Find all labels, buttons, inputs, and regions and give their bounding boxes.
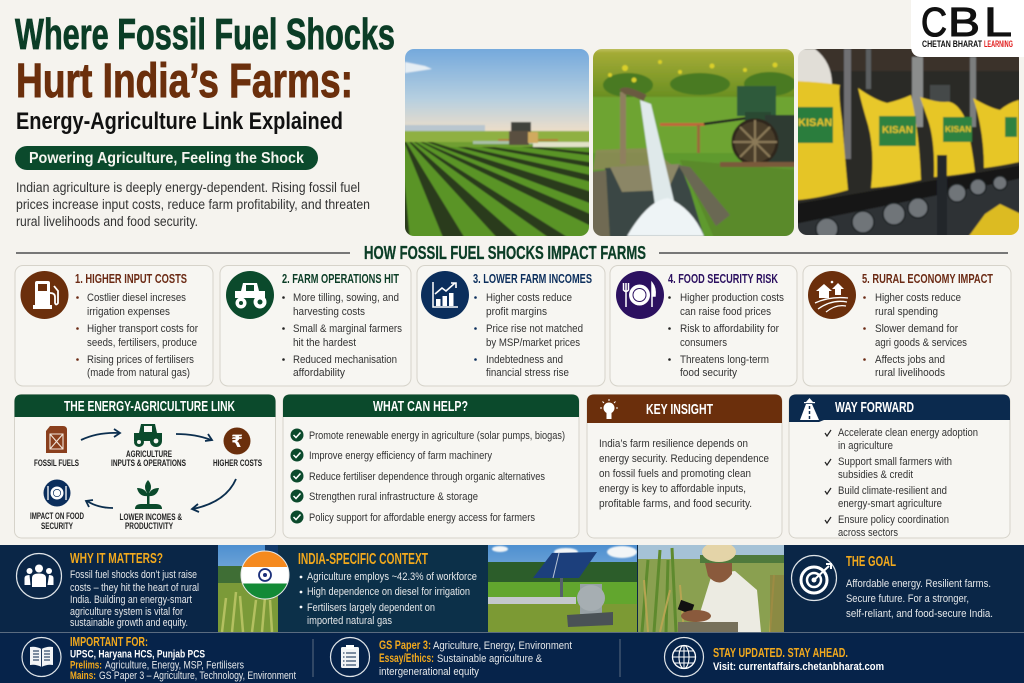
icon: tractor	[226, 271, 274, 319]
insight text: profitable farms, and food security.	[599, 498, 752, 510]
panel: important for: Prelims:	[70, 660, 102, 672]
icon: indian flag circle	[241, 551, 289, 600]
arrow	[81, 429, 120, 440]
bullets: food security	[680, 367, 737, 379]
panel: why it matters: India. Building an energy-smart	[70, 594, 192, 606]
panel: what can help	[283, 394, 579, 538]
heading: 2. FARM OPERATIONS HIT	[282, 272, 399, 286]
photo: urea fertiliser bags on conveyor: KISAN	[945, 124, 971, 134]
checklist: Accelerate clean energy adoption	[838, 427, 978, 439]
bullets: Threatens long-term	[680, 354, 769, 366]
panel header: KEY INSIGHT	[646, 401, 713, 418]
arrow	[192, 479, 236, 512]
checklist: Improve energy efficiency of farm machinery	[309, 450, 492, 462]
bullets: consumers	[680, 337, 727, 349]
logo: Chetan Bharat Learning	[911, 0, 1024, 57]
panel: 2 farm operations hit	[220, 266, 411, 386]
icon: road	[800, 398, 819, 420]
panel: the goal	[792, 553, 993, 620]
panel header: THE ENERGY-AGRICULTURE LINK	[64, 399, 235, 415]
insight text: India’s farm resilience depends on	[599, 438, 748, 450]
photo: farmer using phone in field	[638, 542, 784, 632]
bullets: (made from natural gas)	[87, 367, 190, 379]
panel: india-specific context: High dependence on diesel for irrigation	[307, 586, 470, 598]
panel: important for	[22, 635, 296, 682]
icon: plant, lower incomes: PRODUCTIVITY	[125, 521, 173, 531]
bullets	[474, 292, 583, 379]
panel: the goal: self-reliant, and food-secure India.	[846, 608, 993, 620]
title: Hurt India’s Farms:	[16, 55, 353, 108]
photo: urea fertiliser bags on conveyor	[795, 45, 1023, 240]
panel: gs paper and essay: Sustainable agriculture &	[437, 653, 543, 665]
panel: india-specific context: imported natural gas	[307, 615, 393, 627]
bullets: Higher transport costs for	[87, 323, 198, 335]
icon: clipboard checklist	[330, 638, 370, 676]
icon: people group	[16, 554, 62, 598]
insight text: energy security. Reducing dependence	[599, 453, 769, 465]
title: Where Fossil Fuel Shocks	[15, 10, 395, 59]
panel: gs paper and essay: Agriculture, Energy, Environment	[433, 640, 572, 652]
panel: way forward	[789, 394, 1010, 539]
bullets: Costlier diesel increses	[87, 292, 186, 304]
panel header: WHAT CAN HELP?	[373, 399, 468, 415]
checklist: Ensure policy coordination	[838, 514, 949, 526]
panel: gs paper and essay: Essay/Ethics:	[379, 651, 434, 665]
icon: plant, lower incomes: LOWER INCOMES &	[120, 512, 182, 522]
bullets: Price rise not matched	[486, 323, 583, 335]
icon: target with arrow	[792, 556, 836, 600]
panel: india-specific context: Agriculture employs ~42.3% of workforce	[307, 571, 477, 583]
intro paragraph	[16, 180, 370, 229]
icon: fuel can, fossil fuels	[34, 426, 79, 468]
checklist: Support small farmers with	[838, 456, 952, 468]
panel header	[587, 394, 782, 423]
bullets: Higher production costs	[680, 292, 784, 304]
photo: urea fertiliser bags on conveyor: KISAN	[882, 125, 913, 136]
checklist: Build climate-resilient and	[838, 485, 947, 497]
bullets: Affects jobs and	[875, 354, 945, 366]
icon: village houses and fields	[808, 271, 856, 319]
panel: why it matters: costs – they hit the heart of rural	[70, 582, 199, 594]
icon: globe	[664, 638, 704, 676]
section divider left	[16, 252, 350, 254]
panel: important for: GS Paper 3 – Agriculture, Technology, Environment	[99, 670, 296, 682]
icon: light bulb	[600, 399, 618, 419]
checklist	[290, 428, 565, 524]
panel: 5 rural economy impact	[803, 266, 1011, 386]
bullets: Indebtedness and	[486, 354, 563, 366]
bullets: Small & marginal farmers	[293, 323, 402, 335]
checklist: in agriculture	[838, 440, 893, 452]
panel: stay updated	[664, 638, 884, 676]
panel: 4 food security risk	[610, 266, 797, 386]
panel: important for: IMPORTANT FOR:	[70, 635, 148, 649]
panel header	[283, 394, 579, 417]
panel: the goal: Secure future. For a stronger,	[846, 593, 969, 605]
bullets	[863, 292, 967, 379]
bullets: harvesting costs	[293, 306, 365, 318]
panel: gs paper and essay: GS Paper 3:	[379, 638, 431, 652]
bullets: Risk to affordability for	[680, 323, 779, 335]
title: Energy-Agriculture Link Explained	[16, 108, 343, 135]
heading: 1. HIGHER INPUT COSTS	[75, 272, 187, 286]
checklist	[825, 427, 978, 539]
insight text: on fossil fuels and promoting clean	[599, 468, 751, 480]
panel: 3 lower farm incomes	[417, 266, 605, 386]
panel: the goal: Affordable energy. Resilient farms.	[846, 578, 991, 590]
icon: plate, impact on food security	[30, 480, 84, 531]
photo: diesel pump irrigating channel	[590, 45, 798, 240]
bullets: More tilling, sowing, and	[293, 292, 399, 304]
heading: 4. FOOD SECURITY RISK	[668, 272, 778, 286]
bullets: by MSP/market prices	[486, 337, 580, 349]
panel: gs paper and essay	[330, 638, 572, 678]
bullets	[668, 292, 784, 379]
checklist: across sectors	[838, 527, 898, 539]
icon: tractor, agriculture inputs: AGRICULTURE	[126, 449, 172, 459]
bullets: financial stress rise	[486, 367, 569, 379]
bullets: rural livelihoods	[875, 367, 945, 379]
lower band	[0, 632, 1024, 683]
checklist: Policy support for affordable energy access for farmers	[309, 512, 535, 524]
panel: why it matters: Fossil fuel shocks don’t just raise	[70, 569, 197, 581]
logo: Chetan Bharat Learning: CHETAN BHARAT	[922, 39, 982, 50]
panel: stay updated: Visit: currentaffairs.chetanbharat.com	[713, 661, 884, 673]
logo: Chetan Bharat Learning: C	[921, 0, 947, 45]
panel: important for: UPSC, Haryana HCS, Punjab PCS	[70, 648, 205, 660]
checklist: subsidies & credit	[838, 469, 914, 481]
icon: plate and cutlery	[616, 271, 664, 319]
title	[15, 10, 395, 135]
panel: the goal: THE GOAL	[846, 553, 896, 570]
panel: the energy-agriculture link	[14, 394, 276, 538]
intro paragraph: prices increase input costs, reduce farm profitability, and threaten	[16, 197, 370, 212]
photo: wheat field	[218, 545, 278, 632]
bullets: Reduced mechanisation	[293, 354, 397, 366]
icon: rising bar chart	[421, 271, 469, 319]
panel: key insight	[587, 394, 782, 538]
icon: tractor, agriculture inputs: INPUTS & OPERATIONS	[111, 458, 186, 468]
panel header: WAY FORWARD	[835, 400, 914, 416]
checklist: Promote renewable energy in agriculture (solar pumps, biogas)	[309, 430, 565, 442]
photo: solar pump	[488, 545, 637, 632]
bullets	[76, 292, 198, 379]
panel: india-specific context: INDIA-SPECIFIC CONTEXT	[298, 551, 428, 568]
checklist: Strengthen rural infrastructure & storage	[309, 491, 478, 503]
insight text: energy is key to affordable inputs,	[599, 483, 746, 495]
icon: fuel pump	[20, 271, 68, 319]
panel: why it matters: agriculture system is vital for	[70, 606, 183, 618]
bullets: Rising prices of fertilisers	[87, 354, 194, 366]
panel: important for: Mains:	[70, 670, 96, 682]
bullets	[282, 292, 402, 379]
bottom band background	[0, 545, 1024, 683]
photo: urea fertiliser bags on conveyor: KISAN	[798, 117, 832, 129]
bullets: can raise food prices	[680, 306, 771, 318]
intro paragraph: Indian agriculture is deeply energy-dependent. Rising fossil fuel	[16, 180, 360, 195]
tagline pill: Powering Agriculture, Feeling the Shock	[29, 150, 304, 167]
heading: 3. LOWER FARM INCOMES	[473, 272, 592, 286]
checklist: Reduce fertiliser dependence through organic alternatives	[309, 471, 545, 483]
checklist: energy-smart agriculture	[838, 498, 942, 510]
icon: plate, impact on food security: SECURITY	[41, 521, 73, 531]
icon: rupee, higher costs	[213, 428, 262, 468]
panel: why it matters: WHY IT MATTERS?	[70, 550, 163, 567]
bullets: seeds, fertilisers, produce	[87, 337, 197, 349]
bullets: affordability	[293, 367, 345, 379]
panel: gs paper and essay: intergenerational equity	[379, 666, 480, 678]
icon: plant, lower incomes	[120, 480, 182, 531]
panel: india-specific context: Fertilisers largely dependent on	[307, 602, 435, 614]
icon: rupee, higher costs: HIGHER COSTS	[213, 458, 262, 468]
section heading: HOW FOSSIL FUEL SHOCKS IMPACT FARMS	[364, 243, 646, 263]
arrow	[176, 434, 212, 441]
panel: why it matters: sustainable growth and equity.	[70, 617, 188, 629]
panel header	[14, 394, 276, 417]
arrow	[86, 500, 113, 508]
logo: Chetan Bharat Learning: L	[984, 0, 1012, 45]
tagline pill	[15, 146, 318, 170]
icon: fuel can, fossil fuels: FOSSIL FUELS	[34, 458, 79, 468]
logo: Chetan Bharat Learning: B	[948, 0, 980, 45]
photo: tractor spraying field rows	[400, 45, 595, 241]
insight text	[599, 438, 769, 510]
bullets: Slower demand for	[875, 323, 958, 335]
panel header	[789, 394, 1010, 422]
panel: stay updated: STAY UPDATED. STAY AHEAD.	[713, 645, 848, 660]
bullets: profit margins	[486, 306, 547, 318]
icon: plate, impact on food security: IMPACT ON FOOD	[30, 511, 84, 521]
panel: why it matters	[16, 550, 199, 629]
bullets: agri goods & services	[875, 337, 967, 349]
bullets: Higher costs reduce	[875, 292, 961, 304]
panel: important for: Agriculture, Energy, MSP, Fertilisers	[105, 660, 244, 672]
bullets: rural spending	[875, 306, 938, 318]
icon: open book	[22, 638, 61, 676]
bullets: irrigation expenses	[87, 306, 170, 318]
panel: 1 higher input costs	[15, 266, 213, 386]
bullets: Higher costs reduce	[486, 292, 572, 304]
icon: rupee, higher costs: ₹	[231, 432, 243, 451]
intro paragraph: rural livelihoods and food security.	[16, 214, 198, 229]
bullets: hit the hardest	[293, 337, 357, 349]
icon: tractor, agriculture inputs	[111, 424, 186, 468]
panel: india-specific context	[278, 545, 488, 632]
